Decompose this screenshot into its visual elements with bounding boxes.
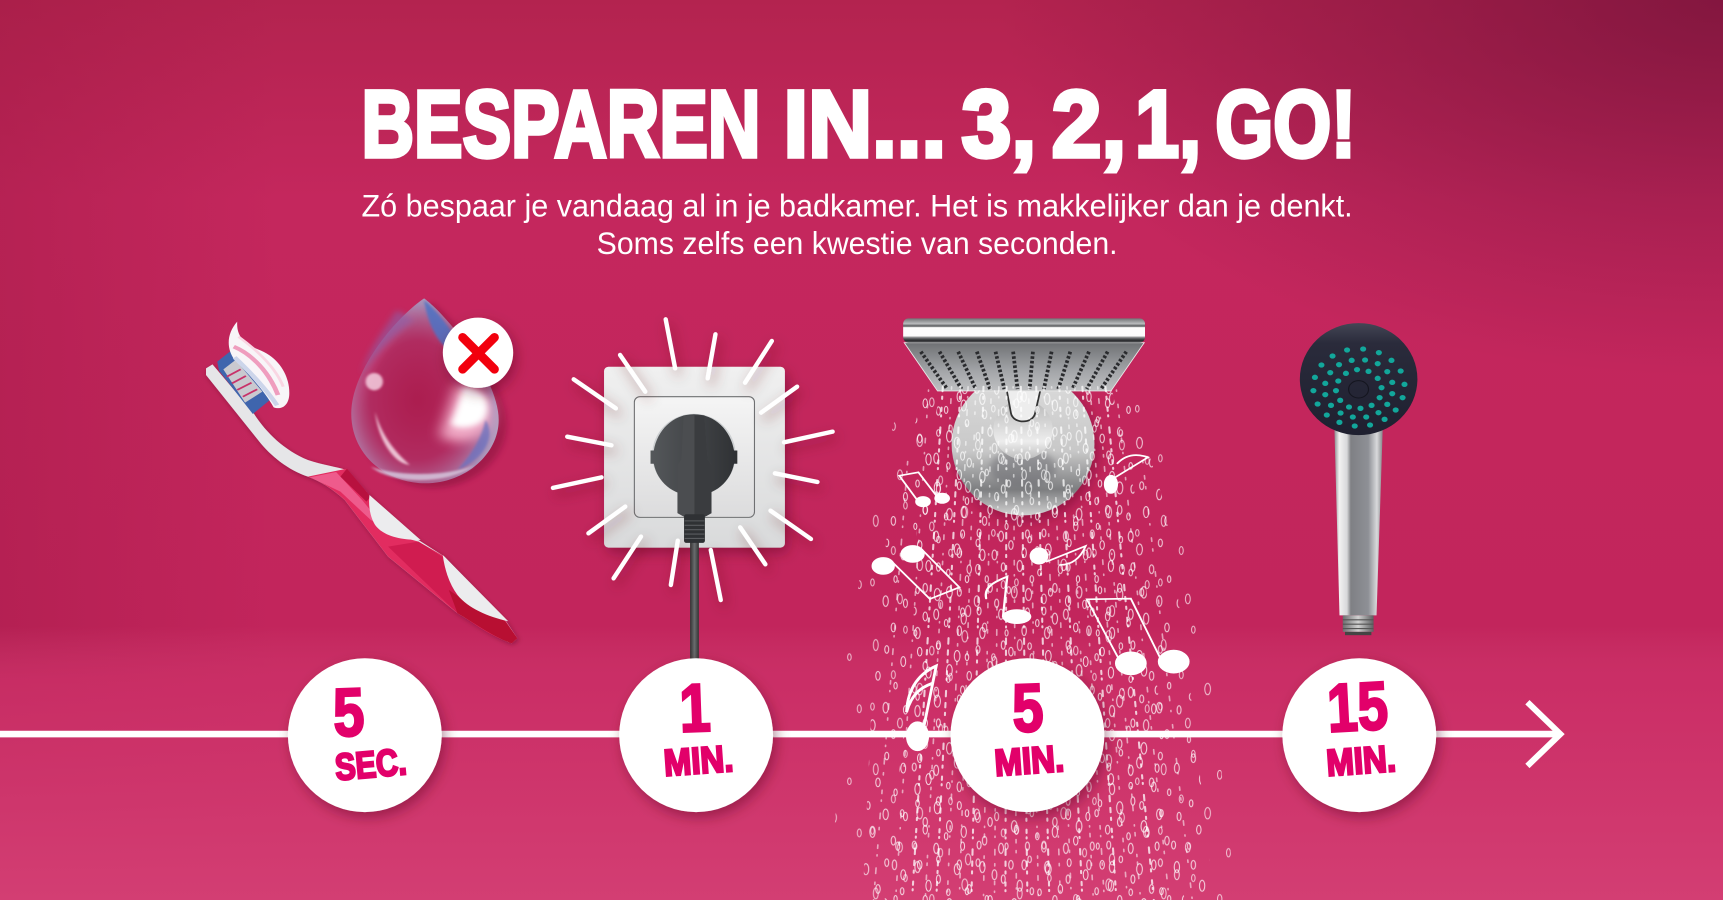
water droplets: [824, 385, 1242, 900]
toothpaste: [229, 322, 289, 408]
plug round body: [651, 414, 737, 516]
timeline marker: 5 min: [951, 658, 1104, 812]
timeline marker: 15 min: MIN.: [1325, 738, 1397, 784]
wall plate: [952, 373, 1094, 515]
socket inner: [634, 397, 754, 517]
icon: rain shower: [903, 318, 1145, 515]
timeline marker: 15 min: 15: [1325, 668, 1390, 747]
timeline marker: 1 min: 1: [678, 671, 712, 747]
note: flag middle: [986, 577, 1030, 623]
subtitle: Zó bespaar je vandaag al in je badkamer. Het is makkelijker dan je denkt.: [362, 188, 1353, 223]
title: BESPAREN: [362, 72, 760, 178]
plate boss: [993, 400, 1053, 459]
icon: water drop: [351, 298, 506, 488]
timeline marker: 1 min: [619, 658, 773, 812]
timeline marker: 5 min: 5: [1011, 671, 1045, 747]
timeline arrow: [0, 702, 1560, 766]
cable: [684, 514, 705, 662]
timeline marker: 15 min: [1282, 658, 1436, 812]
timeline marker: 5 sec: SEC.: [333, 741, 408, 789]
handle dark accents: [310, 469, 517, 643]
note: beamed top left: [899, 472, 949, 506]
title: 1,: [1135, 72, 1201, 178]
shower face: [1300, 323, 1417, 435]
title: GO!: [1215, 72, 1356, 178]
plate shadow: [990, 448, 1056, 488]
title: [362, 72, 1356, 178]
handle white patches: [369, 495, 508, 621]
handle thread: [1343, 615, 1374, 635]
subtitle: Soms zelfs een kwestie van seconden.: [597, 226, 1118, 261]
timeline marker: 5 sec: [288, 658, 442, 812]
handle pink section: [308, 469, 517, 643]
brush handle: [206, 364, 517, 643]
timeline marker: 1 min: MIN.: [663, 738, 735, 784]
note: beamed left: [872, 546, 959, 599]
shower arm: [1007, 389, 1041, 421]
subtitle: [362, 188, 1353, 261]
title: 2,: [1052, 72, 1126, 178]
note: beamed right: [1087, 599, 1189, 674]
title: IN...: [783, 72, 946, 178]
note: flag top right: [1105, 455, 1148, 493]
shower handle: [1334, 430, 1383, 615]
music notes: [872, 455, 1189, 674]
icon: hand shower: [1300, 323, 1417, 635]
head nozzles: [921, 352, 1126, 389]
note: bottom left: [907, 666, 936, 751]
icon: no water badge: [443, 318, 513, 388]
timeline marker: 5 sec: 5: [332, 675, 366, 752]
title: 3,: [961, 72, 1036, 178]
note: flag centre: [1031, 546, 1086, 565]
brush bristles: [217, 351, 272, 414]
drop highlights: [362, 300, 492, 480]
head top bar: [903, 318, 1145, 343]
shower head: [904, 343, 1144, 391]
timeline marker: 5 min: MIN.: [993, 738, 1065, 784]
icon: toothbrush: [206, 322, 517, 643]
energy rays: [553, 319, 833, 600]
socket plate: [604, 367, 785, 548]
teal nozzles: [1310, 346, 1408, 429]
icon: wall socket with plug: [553, 319, 833, 662]
